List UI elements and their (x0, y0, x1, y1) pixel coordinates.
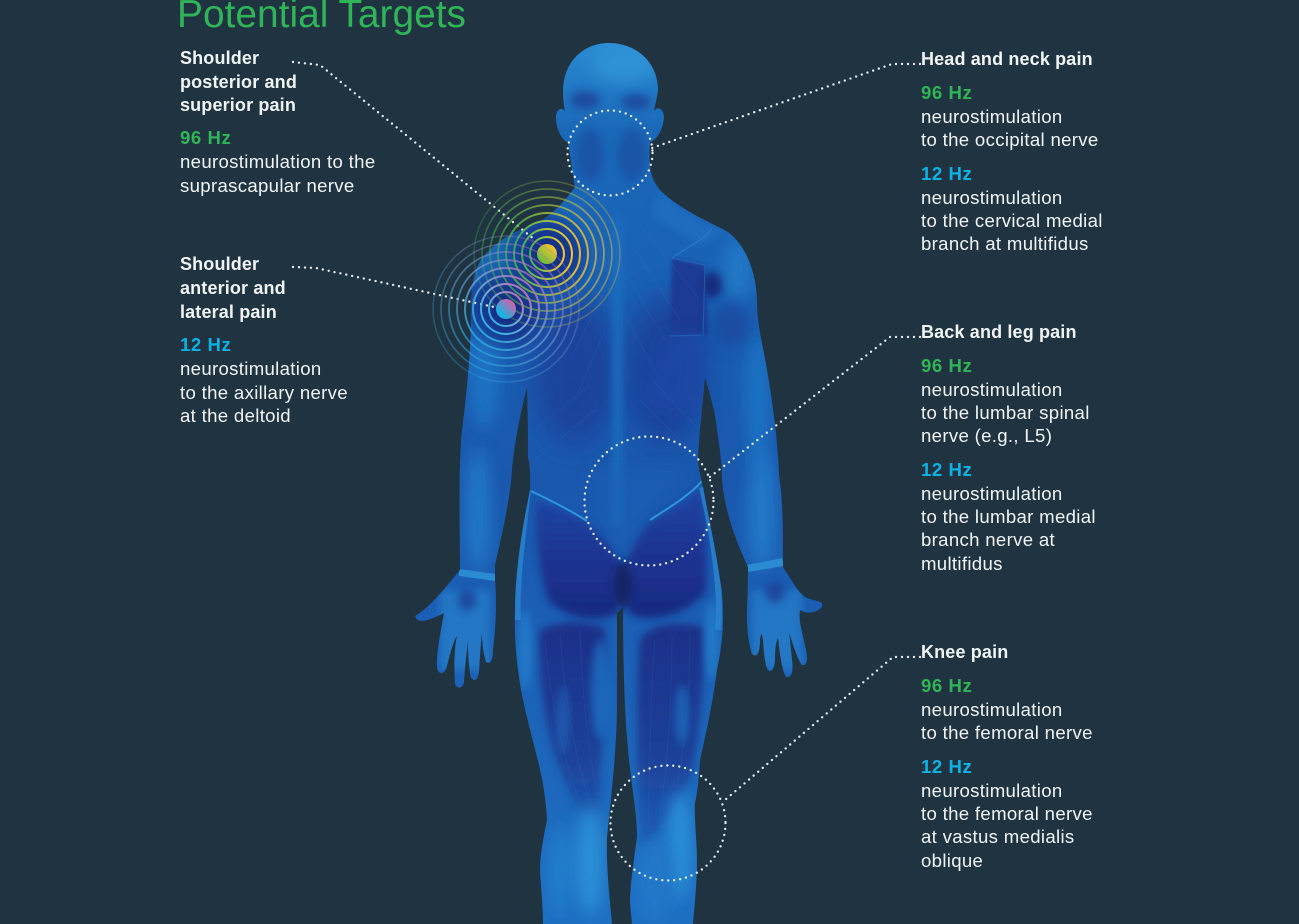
text block: knee pain: to the femoral nerve (921, 803, 1093, 824)
text block: knee pain: at vastus medialis (921, 826, 1075, 847)
text block: back and leg pain: 12 Hz (921, 459, 972, 480)
text block: head and neck pain: to the occipital nerve (921, 129, 1099, 150)
lower back target circle (584, 436, 714, 566)
leader: knee (725, 657, 920, 800)
leader: head and neck (652, 64, 920, 148)
text block: shoulder anterior and lateral pain: to the axillary nerve (180, 382, 348, 403)
text block: knee pain: neurostimulation (921, 780, 1063, 801)
text block: back and leg pain: 96 Hz (921, 355, 972, 376)
gluteals (535, 500, 622, 619)
signal rings: shoulder anterior (433, 236, 579, 382)
signal rings: shoulder posterior (474, 181, 620, 327)
shoulder halos (507, 214, 588, 294)
dotted target circles and leader lines (293, 62, 920, 880)
text block: head and neck pain: 96 Hz (921, 82, 972, 103)
text block: knee pain: oblique (921, 850, 983, 871)
text block: back and leg pain: to the lumbar spinal (921, 402, 1090, 423)
dot: shoulder anterior (496, 299, 516, 319)
text block: head and neck pain: branch at multifidus (921, 233, 1089, 254)
darks: head and neck (570, 91, 600, 109)
text block: knee pain: Knee pain (921, 642, 1008, 662)
text block: head and neck pain: to the cervical medial (921, 210, 1103, 231)
text block: back and leg pain: neurostimulation (921, 379, 1063, 400)
text block: back and leg pain: Back and leg pain (921, 322, 1077, 342)
wrist bands (459, 569, 496, 581)
text block: shoulder posterior and superior pain: Shoulder (180, 48, 259, 68)
text block: shoulder anterior and lateral pain: Shoulder (180, 254, 259, 274)
leader: shoulder posterior (293, 62, 535, 240)
text block: knee pain: 12 Hz (921, 756, 972, 777)
text block: head and neck pain: Head and neck pain (921, 49, 1093, 69)
knee target circle (610, 766, 726, 880)
human body figure (415, 42, 822, 924)
hamstrings (539, 622, 605, 840)
text block: shoulder anterior and lateral pain: 12 Hz (180, 334, 231, 355)
text block: shoulder posterior and superior pain: suprascapular nerve (180, 175, 355, 196)
text block: shoulder posterior and superior pain (180, 48, 375, 196)
text block: head and neck pain: neurostimulation (921, 106, 1063, 127)
text block: head and neck pain: 12 Hz (921, 163, 972, 184)
text block: back and leg pain: neurostimulation (921, 483, 1063, 504)
text block: shoulder anterior and lateral pain: lateral pain (180, 302, 277, 322)
text block: knee pain: neurostimulation (921, 699, 1063, 720)
text block: head and neck pain: neurostimulation (921, 187, 1063, 208)
text block: shoulder anterior and lateral pain: neurostimulation (180, 358, 322, 379)
neck target circle (568, 110, 652, 196)
text block: head and neck pain (921, 49, 1103, 254)
waist line and muscle lines (531, 481, 702, 521)
text block: shoulder posterior and superior pain: neurostimulation to the (180, 151, 375, 172)
leader: back and leg (706, 337, 920, 480)
text block: back and leg pain: branch nerve at (921, 529, 1056, 550)
dot: shoulder posterior (537, 244, 557, 264)
text block: knee pain: 96 Hz (921, 675, 972, 696)
text block: back and leg pain: nerve (e.g., L5) (921, 425, 1052, 446)
text block: back and leg pain: multifidus (921, 553, 1003, 574)
scapula edge (670, 258, 705, 336)
text block: shoulder anterior and lateral pain: anterior and (180, 278, 286, 298)
leader: shoulder anterior (293, 267, 503, 309)
text block: shoulder anterior and lateral pain: at the deltoid (180, 405, 291, 426)
lights (591, 42, 659, 82)
text block: shoulder posterior and superior pain: posterior and (180, 72, 297, 92)
darks: back (533, 295, 617, 445)
text block: knee pain: to the femoral nerve (921, 722, 1093, 743)
text block: back and leg pain: to the lumbar medial (921, 506, 1096, 527)
hand shadows (458, 589, 476, 611)
spine (612, 215, 623, 525)
text block: shoulder posterior and superior pain: 96 Hz (180, 127, 231, 148)
text block: shoulder posterior and superior pain: superior pain (180, 95, 296, 115)
text block: shoulder anterior and lateral pain (180, 254, 348, 426)
text block: knee pain (921, 642, 1093, 871)
muscle fibres (544, 264, 700, 799)
text block: back and leg pain (921, 322, 1096, 574)
sacrum (590, 470, 690, 560)
